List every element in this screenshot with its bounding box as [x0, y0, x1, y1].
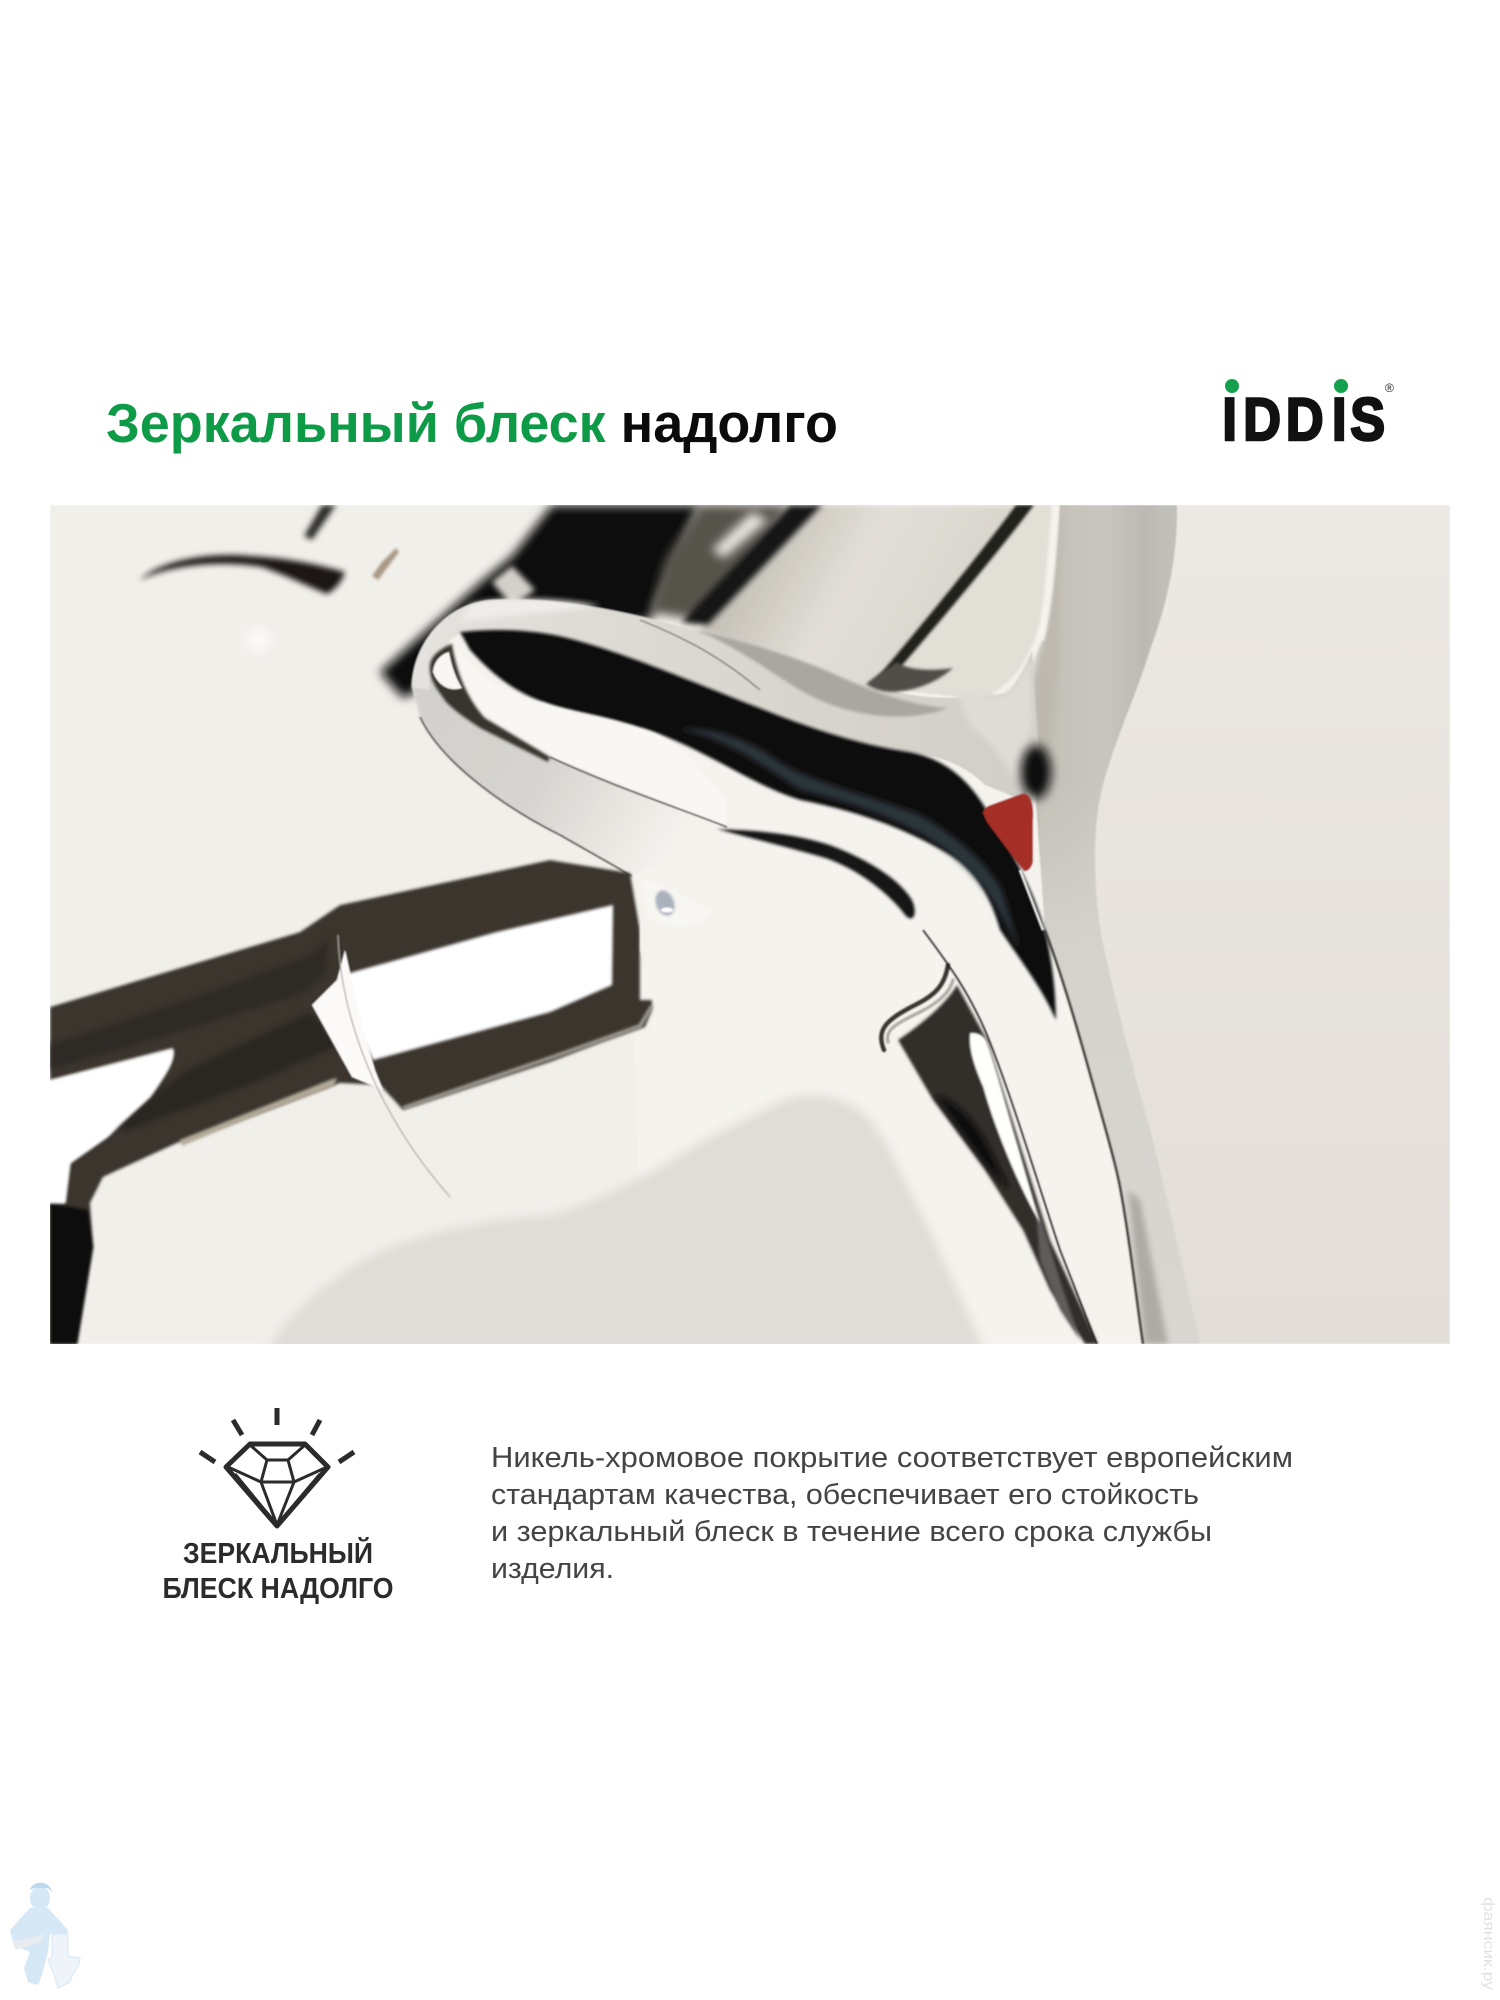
main lever body	[412, 599, 1143, 1344]
light panel behind arm	[700, 505, 1030, 695]
blue droplet	[654, 889, 676, 917]
description text: стандартам качества, обеспечивает его стойкость	[491, 1479, 1199, 1511]
lever top rim	[412, 599, 1040, 800]
lower leg dark facet	[898, 985, 1098, 1344]
spout arm interior	[906, 505, 1060, 696]
icon label: БЛЕСК НАДОЛГО	[162, 1573, 394, 1605]
column grey strip at bottom	[1128, 1190, 1168, 1344]
spout column	[1032, 505, 1178, 922]
left dark band	[50, 860, 652, 1344]
lever white strip	[500, 698, 666, 801]
lever edges	[420, 717, 632, 876]
lever dark streak and eye	[430, 644, 550, 762]
rim crease	[690, 628, 948, 717]
band highlight strip	[180, 1078, 337, 1146]
dark reflection behind lever	[380, 505, 700, 698]
outline	[226, 1444, 328, 1526]
description text: и зеркальный блеск в течение всего срока службы	[491, 1516, 1212, 1548]
window reflection	[343, 905, 613, 1060]
red marker	[983, 794, 1033, 871]
arm ripple	[866, 662, 953, 692]
arm white rim	[1040, 505, 1056, 640]
mid-tone stripes	[650, 505, 790, 620]
icon: diamond	[200, 1408, 354, 1526]
logo: iddis: IDDIS	[1222, 386, 1385, 453]
curved ribbon highlight	[881, 965, 948, 1050]
second dark reflection	[717, 829, 915, 919]
disk edge	[338, 935, 450, 1197]
watermark: plumber with toilet	[10, 1883, 80, 1988]
dark spot behind marker	[1021, 745, 1051, 799]
description text: изделия.	[491, 1553, 614, 1585]
arm dark stripe	[872, 505, 1034, 684]
description text	[491, 1442, 1293, 1585]
watermark: vertical site text: фаянсик.ру	[1480, 1897, 1497, 1991]
blurred background fixture	[140, 505, 399, 652]
drip detail by window	[639, 922, 642, 956]
logo: iddis: ®	[1385, 381, 1394, 395]
facets	[228, 1445, 327, 1525]
photo: chrome faucet close-up	[46, 505, 1450, 1350]
shade on lower surface	[267, 1095, 985, 1350]
title: Зеркальный блеск надолго	[106, 392, 838, 454]
rays	[200, 1408, 354, 1462]
spine thin lines	[923, 930, 1097, 1344]
white glint line	[1020, 870, 1043, 930]
leg white sliver	[970, 1033, 1040, 1223]
description text: Никель-хромовое покрытие соответствует европейским	[491, 1442, 1293, 1474]
black reflection band	[460, 630, 1056, 1020]
icon label: ЗЕРКАЛЬНЫЙ	[183, 1537, 373, 1570]
lever tip silver	[409, 643, 652, 864]
left white reflection patch	[46, 1050, 173, 1203]
